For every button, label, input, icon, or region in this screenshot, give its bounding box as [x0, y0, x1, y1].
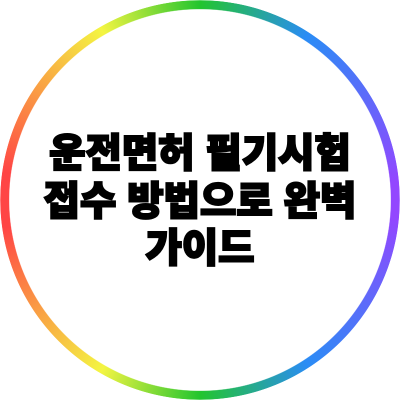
title: 운전면허 필기시험	[49, 132, 351, 176]
title	[43, 132, 356, 271]
title: 접수 방법으로 완벽	[44, 180, 356, 224]
title: 가이드	[145, 227, 255, 271]
